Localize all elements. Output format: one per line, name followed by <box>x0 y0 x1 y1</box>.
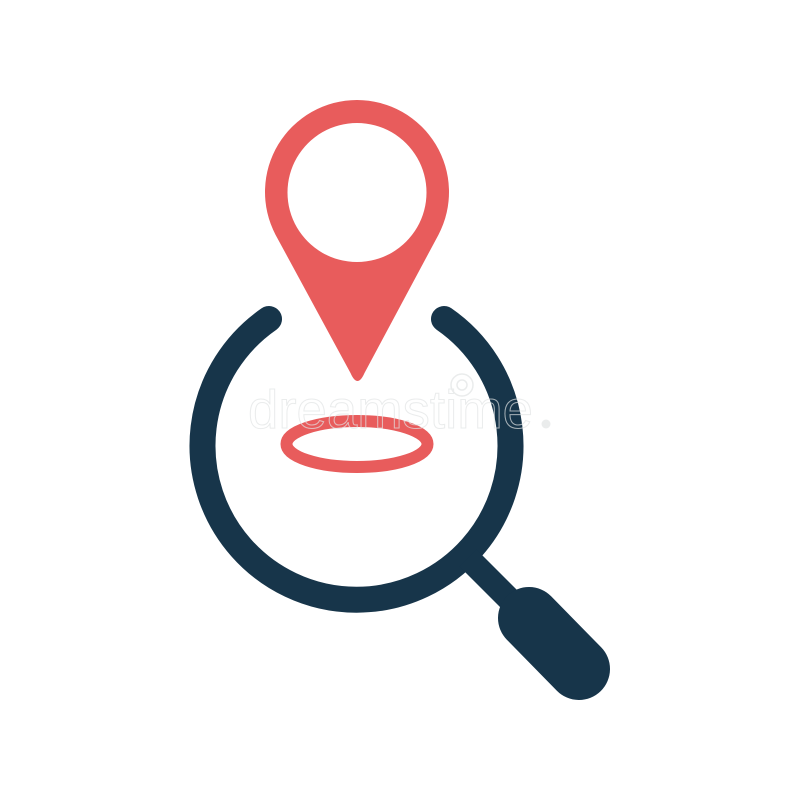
magnifier ring <box>203 319 510 600</box>
watermark: dreamstime: dreamstime <box>248 380 533 440</box>
icon: magnifying glass <box>203 319 579 669</box>
pin body <box>265 100 449 381</box>
magnifier handle <box>529 618 579 669</box>
icon: map pin <box>265 100 449 467</box>
magnifier neck <box>468 558 525 615</box>
pin shadow ring <box>286 421 428 467</box>
